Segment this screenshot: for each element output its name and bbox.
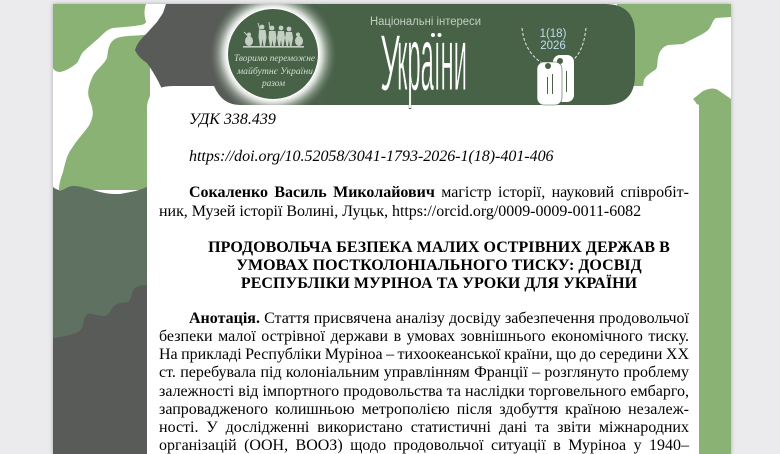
article title: УМОВАХ ПОСТКОЛОНІАЛЬНОГО ТИСКУ: ДОСВІД <box>236 257 642 274</box>
author block: Сокаленко Василь Миколайович магістр історії, науковий співробіт- <box>189 184 689 201</box>
author block <box>159 184 689 220</box>
main white text panel <box>147 86 699 454</box>
abstract text: ст. перебувала під колоніальним управлінням Франції – розглянуто проблему <box>159 364 689 381</box>
abstract text: На прикладі Республіки Муріноа – тихоокеанської країни, що до середини ХХ <box>159 346 689 363</box>
journal title <box>380 10 467 110</box>
camouflage shape: left green band <box>59 35 150 190</box>
UDC code: УДК 338.439 <box>189 111 276 128</box>
article title: РЕСПУБЛІКИ МУРІНОА ТА УРОКИ ДЛЯ УКРАЇНИ <box>241 275 637 292</box>
camouflage shape: left dark grey band <box>53 285 148 454</box>
abstract text: безпеки малої острівної держави в умовах зовнішнього економічного тиску. <box>159 328 689 345</box>
issue number <box>540 28 567 52</box>
camouflage shape: left grey-green band <box>53 186 148 345</box>
journal subtitle: Національні інтереси <box>370 16 481 28</box>
abstract text <box>159 310 690 454</box>
emblem motto: Творимо переможне <box>234 54 315 64</box>
emblem motto: майбутнє України <box>236 66 313 77</box>
abstract text: організацій (ООН, ВООЗ) щодо продовольчої ситуації в Муріноа у 1940– <box>159 437 689 454</box>
abstract text: залежності від імпортного продовольства та наслідки торговельного ембарго, <box>159 383 689 400</box>
camouflage shape: top-right green <box>617 4 731 90</box>
abstract text: запровадженого колишньою метрополією після здобуття країною незалеж- <box>159 401 689 418</box>
article title: ПРОДОВОЛЬЧА БЕЗПЕКА МАЛИХ ОСТРІВНИХ ДЕРЖАВ В <box>208 239 670 256</box>
soldiers silhouette <box>243 22 304 48</box>
emblem motto <box>234 54 315 89</box>
abstract text: ності. У дослідженні використано статистичні дані та звіти міжнародних <box>159 419 689 436</box>
camouflage shape: right green band <box>693 88 731 454</box>
author block: ник, Музей історії Волині, Луцьк, https://orcid.org/0009-0009-0011-6082 <box>159 203 641 220</box>
journal banner <box>135 4 635 109</box>
DOI link: https://doi.org/10.52058/3041-1793-2026-1(18)-401-406 <box>189 148 554 165</box>
camouflage shape: top-left green <box>53 4 146 72</box>
journal banner: країни <box>397 10 467 110</box>
abstract text: Анотація. Стаття присвячена аналізу досвіду забезпечення продовольчої <box>189 310 689 327</box>
issue number: 2026 <box>540 40 566 52</box>
emblem motto: разом <box>261 79 285 89</box>
emblem circle <box>228 9 318 99</box>
issue number: 1(18) <box>540 28 567 40</box>
icon: dog tags <box>522 28 586 105</box>
article title <box>208 239 670 292</box>
white panel corner over banner <box>147 86 240 112</box>
journal title: У <box>380 18 400 107</box>
